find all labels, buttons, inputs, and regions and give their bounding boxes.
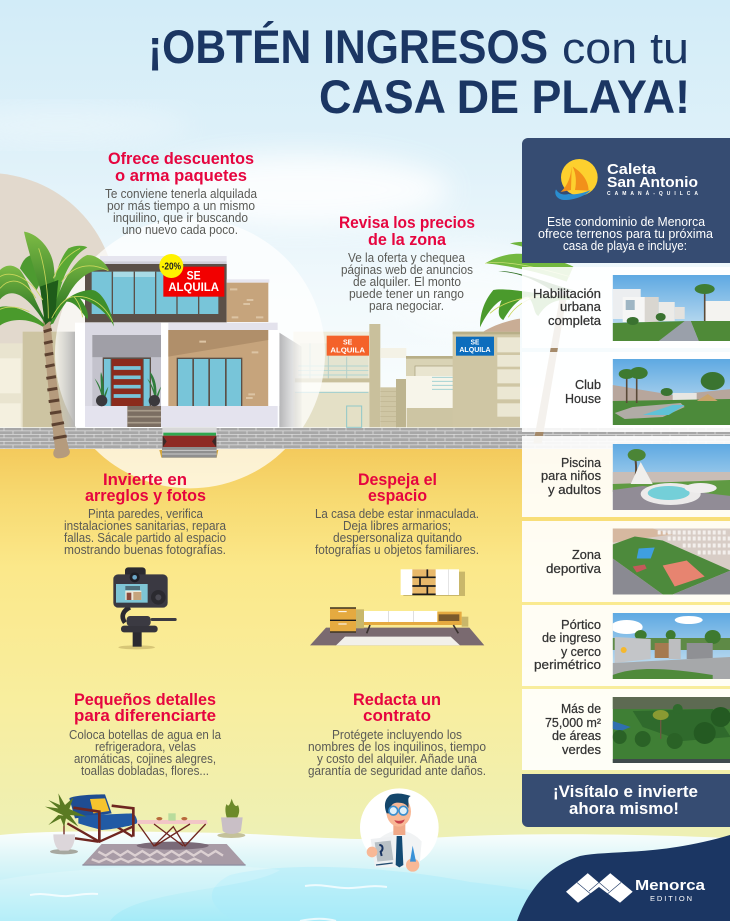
tip: Despeja el espacio: Deja libres armarios;: [343, 519, 451, 533]
panel intro text: ofrece terrenos para tu próxima: [538, 226, 714, 241]
row label: Más de 75,000 m2 de áreas verdes: verdes: [562, 742, 601, 757]
tip: Pequeños detalles: [69, 691, 221, 778]
tip: Ofrece descuentos: Ofrece descuentos: [108, 150, 254, 168]
tip: Despeja el espacio: espacio: [368, 487, 427, 505]
armchair: [67, 794, 137, 842]
tip: Redacta un contrato: Redacta un: [353, 691, 441, 709]
palm tree left: trunk: [43, 319, 70, 458]
tip: Invierte en arreglos y fotos: instalaciones sanitarias, repara: [64, 519, 226, 533]
row label: Club House: [565, 377, 601, 406]
panel row 4: [522, 521, 730, 602]
row label: Más de 75,000 m2 de áreas verdes: [545, 701, 602, 757]
tip: Ofrece descuentos: Te conviene tenerla alquilada: [105, 187, 257, 201]
tip: Revisa los precios: para negociar.: [369, 299, 444, 313]
row label: Pórtico de ingreso y cerco perimétrico: Pórtico: [561, 617, 601, 632]
panel header: [522, 138, 730, 263]
rug and table: [82, 813, 246, 866]
row label: Habilitación urbana completa: completa: [548, 313, 602, 328]
tip: Revisa los precios: Revisa los precios: [339, 214, 475, 232]
panel row 6: [522, 689, 730, 770]
row label: Habilitación urbana completa: urbana: [560, 299, 602, 314]
tip: Invierte en arreglos y fotos: mostrando buenas fotografías.: [64, 543, 226, 557]
call to action: [522, 774, 730, 827]
background: sea water: [0, 831, 730, 921]
panel row 2: [522, 352, 730, 432]
row label: Piscina para niños y adultos: Piscina: [561, 455, 602, 470]
tip: Redacta un contrato: Protégete incluyendo los: [332, 728, 462, 742]
scene: house street: [0, 218, 520, 488]
tip: Redacta un contrato: contrato: [363, 707, 431, 725]
logo: Caleta San Antonio: Caleta: [607, 161, 657, 178]
tip: Invierte en arreglos y fotos: Invierte en: [103, 471, 187, 489]
row label: Más de 75,000 m2 de áreas verdes: Más de: [561, 701, 601, 716]
sign: se alquila blue: SE: [471, 338, 479, 347]
panel intro text: casa de playa e incluye:: [563, 238, 687, 253]
row label: Zona deportiva: Zona: [572, 547, 602, 562]
logo: Menorca Edition: [566, 873, 706, 903]
photo: entrance gate: [611, 613, 730, 679]
sign: se alquila orange: SE: [343, 337, 352, 346]
photo: green areas: [613, 697, 730, 763]
tip: Redacta un contrato: y costo del alquiler. Añade una: [317, 752, 477, 766]
left neighbour building: [0, 332, 76, 427]
tip: Revisa los precios: [339, 214, 475, 313]
row label: Piscina para niños y adultos: para niños: [541, 468, 601, 483]
tip: Redacta un contrato: garantía de seguridad ante daños.: [308, 764, 486, 778]
tip: Redacta un contrato: [308, 691, 486, 778]
title: CASA DE PLAYA!: [319, 70, 690, 123]
row label: Piscina para niños y adultos: [541, 455, 602, 497]
palm tree left: crown: [0, 232, 114, 327]
title: ¡OBTÉN INGRESOS: [148, 20, 548, 73]
row label: Club House: Club: [575, 377, 601, 392]
sign: se alquila red: SE: [187, 268, 201, 282]
call to action: ¡Visítalo e invierte: [553, 782, 698, 801]
row label: Zona deportiva: deportiva: [546, 561, 602, 576]
logo: Menorca Edition: EDITION: [650, 894, 692, 903]
tip: Pequeños detalles: toallas dobladas, flores...: [81, 764, 209, 778]
sign: se alquila red: ALQUILA: [168, 280, 219, 294]
tip: Invierte en arreglos y fotos: fallas. Sácale partido al espacio: [64, 531, 226, 545]
icon: patio furniture: [45, 793, 246, 866]
sign: se alquila orange: [327, 336, 369, 356]
row label: Pórtico de ingreso y cerco perimétrico: y cerco: [561, 644, 601, 659]
logo: Caleta San Antonio: San Antonio: [607, 174, 698, 191]
right potted plant: [217, 799, 245, 838]
tip: Despeja el espacio: despersonaliza quitando: [333, 531, 462, 545]
tip: Ofrece descuentos: uno nuevo cada poco.: [122, 223, 238, 237]
right panel: background rows: [522, 267, 730, 770]
tip: Despeja el espacio: La casa debe estar inmaculada.: [315, 507, 479, 521]
tip: Invierte en arreglos y fotos: [64, 471, 226, 557]
badge: discount: -20%: [162, 262, 181, 273]
call to action: ahora mismo!: [569, 799, 679, 818]
row label: Pórtico de ingreso y cerco perimétrico: perimétrico: [534, 657, 601, 672]
tip: Pequeños detalles: Pequeños detalles: [74, 691, 216, 709]
row label: Pórtico de ingreso y cerco perimétrico: [534, 617, 601, 672]
sign: se alquila orange: ALQUILA: [330, 345, 365, 354]
icon: potted plants: [95, 372, 161, 406]
right neighbour building: [396, 319, 520, 427]
photo: urbanization: [613, 275, 730, 341]
hill behind the houses: [0, 173, 116, 427]
sign: se alquila blue: [456, 337, 494, 356]
white halo circle: [55, 218, 325, 488]
row label: Zona deportiva: [546, 547, 602, 576]
logo: Caleta San Antonio: [555, 159, 698, 200]
mid neighbour building: [293, 324, 406, 427]
logo: Caleta San Antonio: CAMANÁ-QUILCA: [607, 190, 698, 197]
panel row 3: [522, 436, 730, 517]
tip: Pequeños detalles: para diferenciarte: [74, 707, 216, 725]
left potted plant: [45, 793, 87, 854]
photo: sports area: [613, 528, 730, 594]
footer corner shape: [517, 835, 730, 921]
row label: Más de 75,000 m2 de áreas verdes: de áreas: [552, 728, 601, 743]
panel row 1: [522, 267, 730, 348]
tip: Revisa los precios: puede tener un rango: [349, 287, 464, 301]
tip: Revisa los precios: páginas web de anuncios: [341, 263, 473, 277]
row label: Pórtico de ingreso y cerco perimétrico: de ingreso: [542, 630, 601, 645]
tip: Ofrece descuentos: [105, 150, 257, 237]
photo: club house: [613, 359, 730, 425]
panel intro text: [538, 214, 714, 253]
photo: pool: [613, 444, 730, 510]
icon: camera on tripod: [113, 567, 177, 649]
title: con tu: [562, 24, 689, 73]
palm tree right: [480, 242, 573, 443]
tip: Ofrece descuentos: por más tiempo a un mismo: [107, 199, 255, 213]
brick wall: [0, 428, 730, 449]
row label: Habilitación urbana completa: Habilitación: [533, 286, 601, 301]
tip: Pequeños detalles: refrigeradora, velas: [95, 740, 196, 754]
panel intro text: Este condominio de Menorca: [547, 214, 706, 229]
tip: Revisa los precios: de la zona: [368, 231, 447, 249]
tip: Ofrece descuentos: o arma paquetes: [115, 167, 247, 185]
row label: Club House: House: [565, 391, 601, 406]
tip: Pequeños detalles: Coloca botellas de agua en la: [69, 728, 221, 742]
tip: Revisa los precios: Ve la oferta y chequea: [348, 251, 465, 265]
tip: Pequeños detalles: aromáticas, cojines alegres,: [74, 752, 216, 766]
panel row 5: [522, 605, 730, 686]
background: sky: [0, 0, 730, 450]
tip: Despeja el espacio: fotografías u objetos familiares.: [315, 543, 479, 557]
sign: se alquila red: [163, 267, 224, 297]
main house: [55, 256, 302, 427]
tip: Revisa los precios: de alquiler. El monto: [353, 275, 461, 289]
tip: Invierte en arreglos y fotos: arreglos y fotos: [85, 487, 206, 505]
entrance gate and steps: [159, 427, 218, 458]
title: [148, 20, 690, 123]
tip: Redacta un contrato: nombres de los inquilinos, tiempo: [308, 740, 486, 754]
row label: Habilitación urbana completa: [533, 286, 602, 328]
sign: se alquila blue: ALQUILA: [459, 345, 491, 354]
row label: Más de 75,000 m2 de áreas verdes: 75,000 m²: [545, 715, 602, 730]
tip: Ofrece descuentos: inquilino, que ir buscando: [113, 211, 248, 225]
badge: discount: [159, 254, 183, 278]
icon: man with contract: [360, 788, 439, 872]
background: sand: [0, 449, 730, 844]
tip: Despeja el espacio: [315, 471, 479, 557]
tip: Despeja el espacio: Despeja el: [358, 471, 437, 489]
row label: Piscina para niños y adultos: y adultos: [548, 482, 601, 497]
tip: Invierte en arreglos y fotos: Pinta paredes, verifica: [88, 507, 203, 521]
logo: Menorca Edition: Menorca: [635, 877, 706, 894]
icon: living room furniture: [310, 569, 484, 645]
